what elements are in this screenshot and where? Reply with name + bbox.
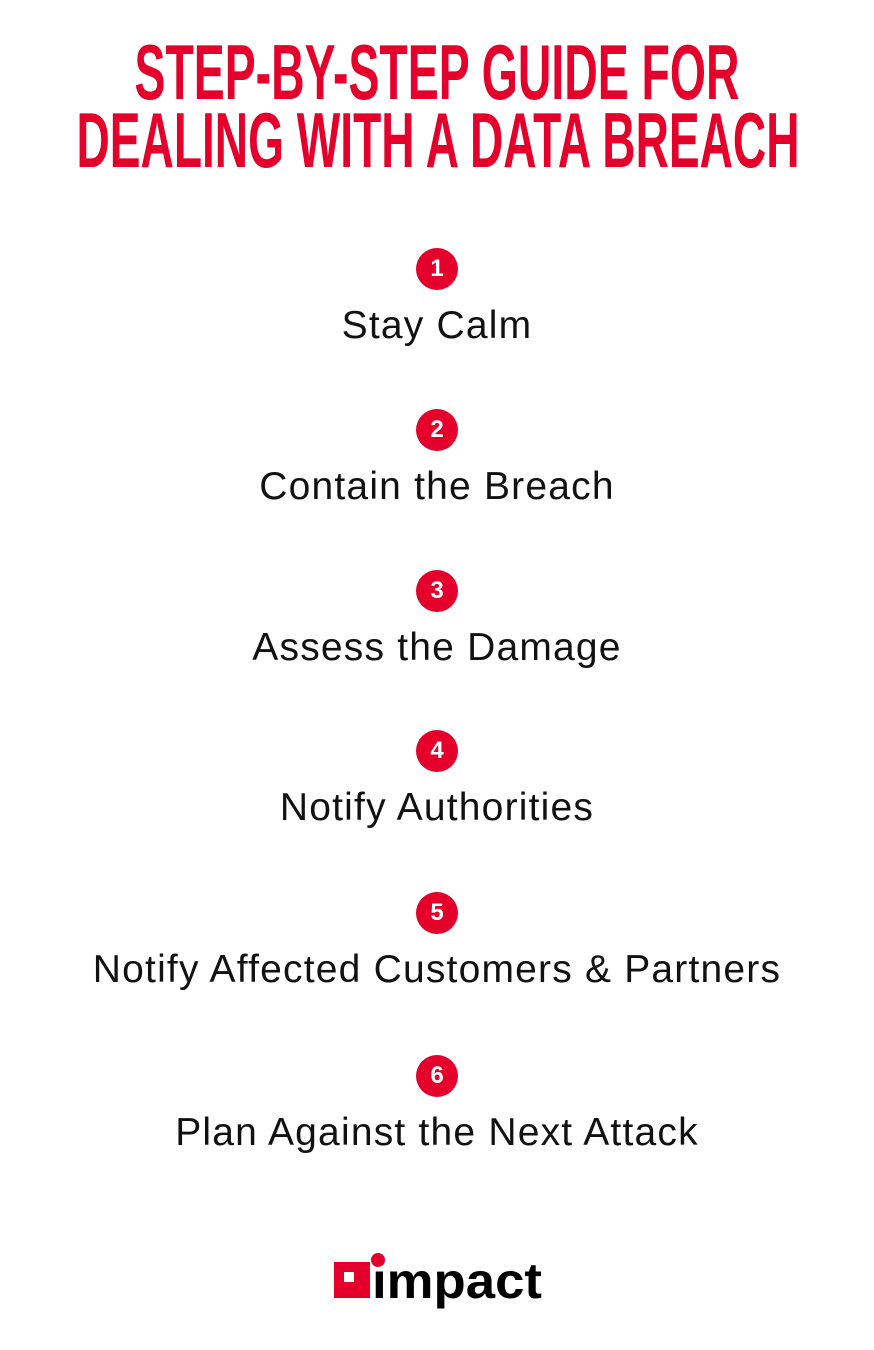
step 1	[342, 248, 532, 347]
step 4	[280, 730, 594, 829]
step 5	[93, 892, 781, 991]
step 2: 2	[430, 416, 444, 443]
step 2	[259, 409, 615, 508]
step 4: Notify Authorities	[280, 786, 594, 829]
title	[76, 28, 800, 184]
step 5: 5	[430, 899, 444, 926]
step 1: 1	[430, 255, 444, 282]
step 3	[252, 570, 622, 669]
logo: impact: ımpact	[372, 1253, 542, 1309]
step 3: 3	[430, 577, 444, 604]
step 2: Contain the Breach	[259, 465, 615, 508]
step 4: 4	[430, 737, 444, 764]
step 6	[175, 1055, 699, 1154]
step 6: 6	[430, 1062, 444, 1089]
step 3: Assess the Damage	[252, 626, 622, 669]
step 5: Notify Affected Customers & Partners	[93, 948, 781, 991]
step 6: Plan Against the Next Attack	[175, 1111, 699, 1154]
step 1: Stay Calm	[342, 304, 532, 347]
